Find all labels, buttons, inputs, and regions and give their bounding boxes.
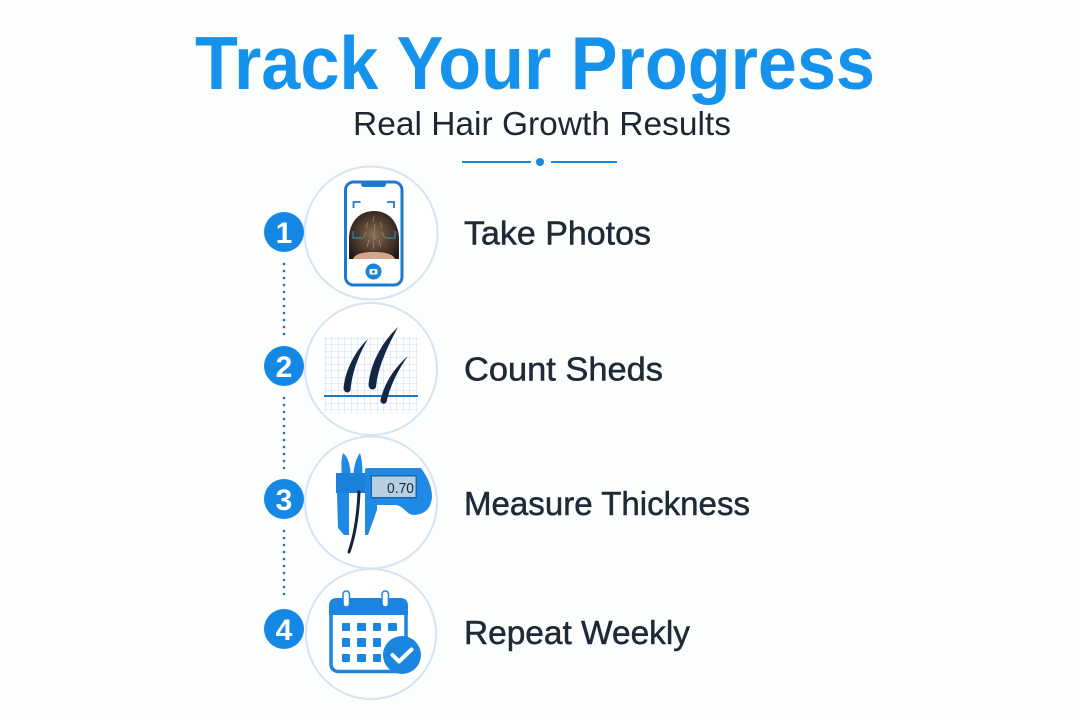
title divider [462, 158, 617, 166]
icon circle 2 [305, 303, 437, 435]
label: count sheds: Count Sheds [464, 350, 663, 388]
icon: digital caliper [336, 453, 432, 552]
icon: hair strands on grid [324, 327, 418, 413]
label: repeat weekly: Repeat Weekly [464, 614, 691, 651]
badge 4: 4 [276, 614, 293, 647]
step 3: measure thickness [264, 436, 750, 568]
subtitle: Real Hair Growth Results [353, 105, 731, 142]
title: Track Your Progress [195, 21, 875, 105]
icon: digital caliper: 0.70 [387, 480, 414, 497]
badge 1: 1 [276, 217, 292, 250]
badge 3: 3 [276, 484, 292, 517]
step 2: count sheds [264, 303, 663, 435]
icon circle 1 [304, 166, 438, 300]
badge 3 [264, 479, 304, 519]
step 1: take photos [264, 166, 651, 300]
badge 1 [264, 212, 304, 252]
step 4: repeat weekly [264, 569, 691, 699]
label: measure thickness: Measure Thickness [464, 485, 750, 522]
badge 2: 2 [276, 351, 292, 384]
badge 4 [264, 609, 304, 649]
step connector dots [283, 264, 285, 600]
label: take photos: Take Photos [464, 214, 651, 252]
icon circle 4 [306, 569, 436, 699]
icon circle 3 [305, 436, 437, 568]
icon: phone with scalp photo [346, 181, 402, 285]
icon: calendar with check [329, 591, 421, 674]
badge 2 [264, 346, 304, 386]
